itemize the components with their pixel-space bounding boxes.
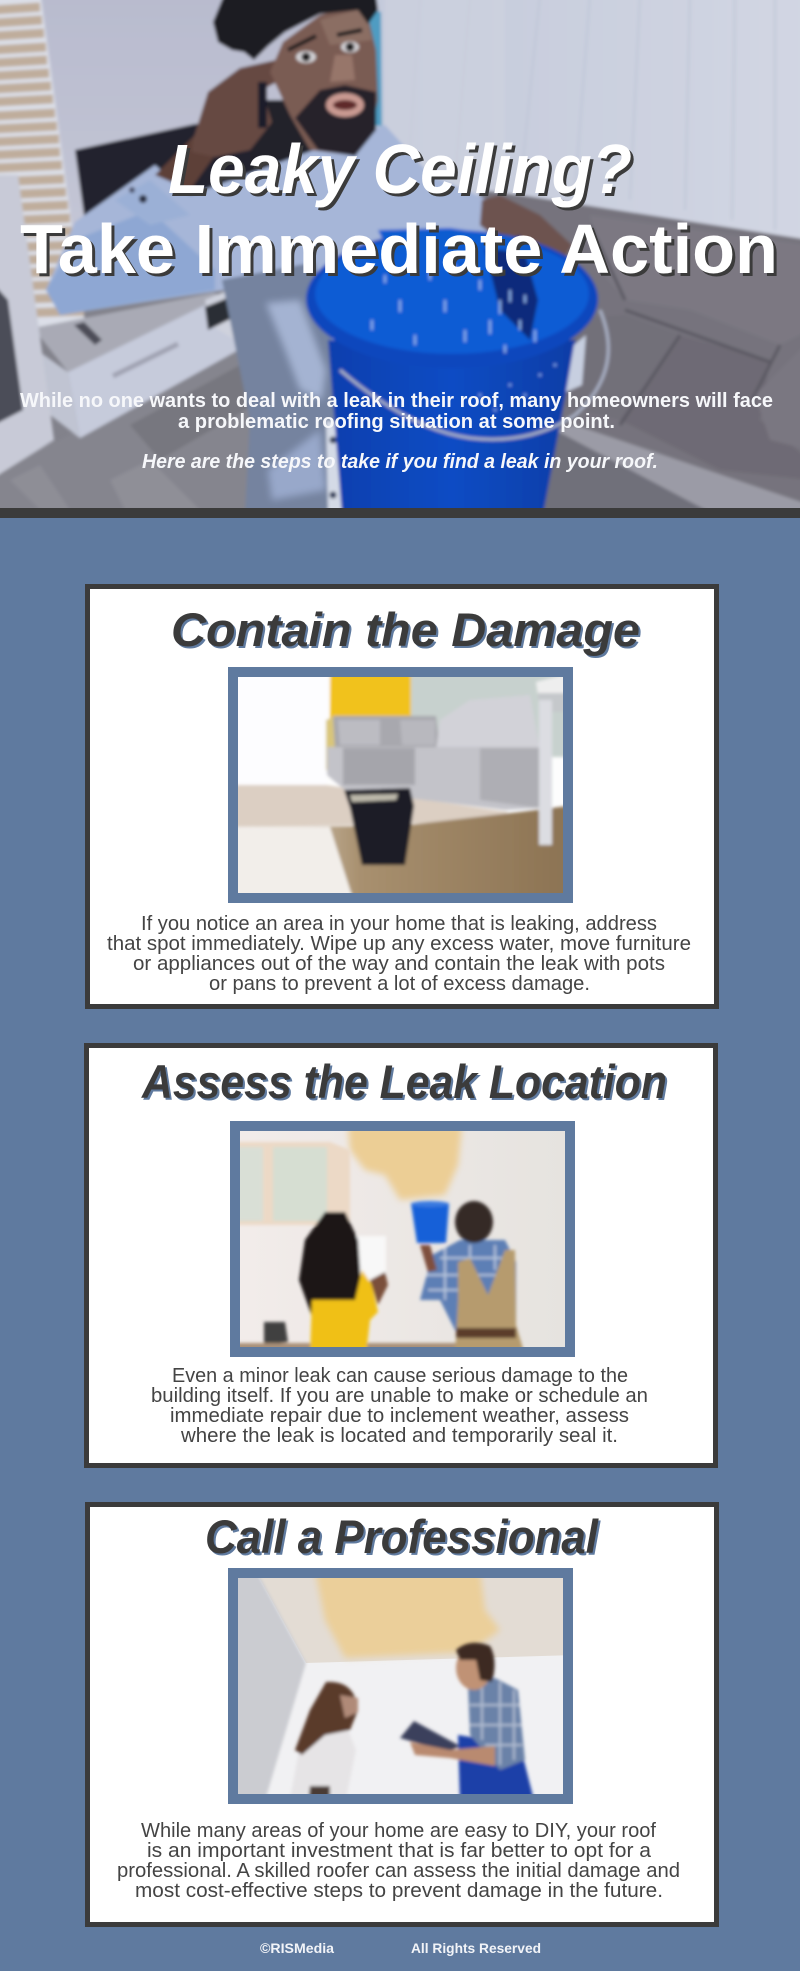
body text: assess the leak location: immediate repair due to inclement weather, assess: [170, 1405, 629, 1427]
water on wall: [385, 0, 505, 190]
footer: [260, 1940, 541, 1956]
photo: couple catching a leak at the wall: [230, 1121, 575, 1357]
hair: [213, 0, 378, 60]
body text: assess the leak location: where the leak is located and temporarily seal it.: [180, 1425, 618, 1447]
panel: call a professional: [88, 1504, 716, 1924]
body text: call a professional: While many areas of your home are easy to DIY, your roof: [141, 1820, 656, 1842]
lower torso: [222, 262, 345, 515]
hero intro text: While no one wants to deal with a leak in their roof, many homeowners will face: [20, 390, 773, 412]
sleeve and torso: [46, 125, 510, 420]
body text: assess the leak location: Even a minor leak can cause serious damage to the: [172, 1365, 628, 1387]
hero italic callout: Here are the steps to take if you find a leak in your roof.: [142, 451, 658, 473]
body text: call a professional: is an important investment that is far better to opt for a: [147, 1840, 652, 1862]
right hand: [480, 195, 572, 265]
hero section: [0, 0, 800, 515]
heading: assess the leak location: Assess the Leak Location: [141, 1055, 667, 1108]
body text: call a professional: most cost-effective steps to prevent damage in the future.: [135, 1880, 663, 1902]
body text: call a professional: [117, 1820, 680, 1902]
body text: contain the damage: If you notice an area in your home that is leaking, address: [141, 913, 657, 935]
footer: ©RISMedia: [260, 1940, 334, 1956]
body text: contain the damage: that spot immediately. Wipe up any excess water, move furniture: [107, 933, 691, 955]
footer: All Rights Reserved: [411, 1940, 541, 1956]
photo: couple inspecting a stained ceiling: [228, 1568, 575, 1804]
photo: bucket on living room floor: [228, 667, 576, 905]
left cabinet: [0, 175, 54, 480]
divider bar: [0, 508, 800, 518]
sofa: [480, 190, 800, 515]
floor planks: [0, 300, 350, 515]
panel: contain the damage: [88, 586, 716, 1006]
body text: contain the damage: or pans to prevent a lot of excess damage.: [209, 973, 590, 995]
hero title line 2: Take Immediate Action: [20, 210, 778, 288]
heading: call a professional: Call a Professional: [205, 1510, 599, 1563]
hero title line 1: Leaky Ceiling?: [168, 130, 632, 208]
TV: [75, 120, 300, 222]
bucket: [328, 340, 576, 515]
body text: contain the damage: or appliances out of the way and contain the leak with pots: [133, 953, 665, 975]
forearm and hand: [155, 135, 215, 190]
body text: assess the leak location: building itself. If you are unable to make or schedule an: [151, 1385, 648, 1407]
body text: assess the leak location: [151, 1365, 648, 1447]
hero intro text: [20, 390, 773, 433]
face: [270, 4, 378, 155]
hero photo: man catching a ceiling leak in a blue bucket: [0, 0, 800, 508]
stand: [33, 293, 240, 372]
panel: assess the leak location: [86, 1046, 716, 1466]
heading: contain the damage: Contain the Damage: [171, 603, 640, 656]
hero intro text: a problematic roofing situation at some point.: [178, 411, 615, 433]
body text: contain the damage: [107, 913, 691, 995]
dark gap by neck: [250, 100, 320, 170]
body text: call a professional: professional. A skilled roofer can assess the initial damage and: [117, 1860, 680, 1882]
teal strip: [366, 8, 382, 126]
